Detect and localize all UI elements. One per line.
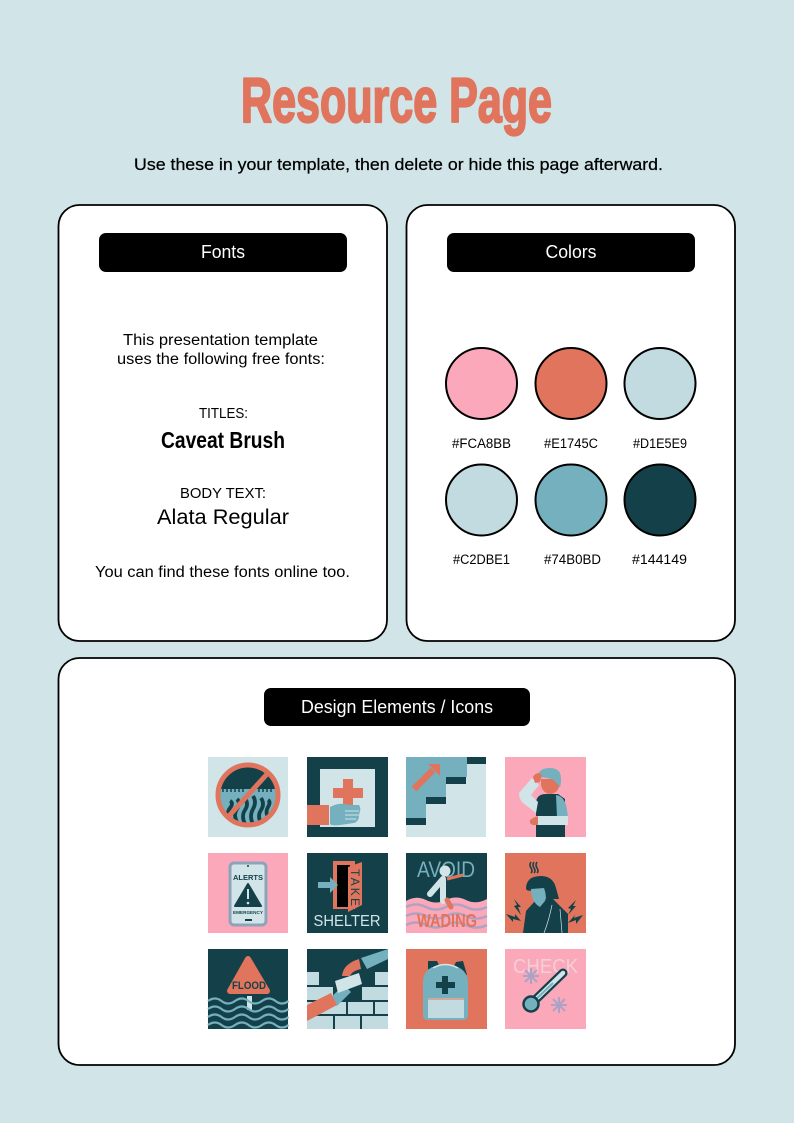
swatch: coral: #E1745C (544, 436, 598, 451)
heading: colors: Colors (546, 242, 596, 262)
swatch: coral (536, 348, 606, 451)
heading: fonts (99, 233, 347, 272)
swatch: dark teal (624, 464, 696, 567)
swatch: teal (536, 464, 606, 567)
text: note: You can find these fonts online too. (95, 564, 350, 581)
icon: check temperature (505, 949, 586, 1029)
swatch: dark teal: #144149 (632, 552, 687, 567)
heading: design elements (264, 688, 530, 726)
heading: design elements: Design Elements / Icons (301, 697, 493, 717)
text: body font: BODY TEXT: (180, 485, 266, 502)
swatch: teal: #74B0BD (544, 552, 601, 567)
icon: no wading (208, 757, 288, 837)
text: intro (117, 332, 325, 368)
text: body font (157, 485, 289, 529)
swatch: pale blue (624, 348, 696, 451)
icon: avoid wading: AVOID (417, 857, 475, 882)
heading: colors (447, 233, 695, 272)
icon: go upstairs (406, 757, 486, 837)
icon: avoid wading (406, 853, 487, 933)
icon: phone alert: ALERTS (233, 873, 263, 882)
icon: avoid wading: WADING (417, 911, 477, 931)
swatch: light blue: #C2DBE1 (453, 552, 510, 567)
icon: take shelter (307, 853, 388, 933)
text: intro: uses the following free fonts: (117, 351, 325, 368)
icon: flood sign: FLOOD (232, 980, 266, 992)
title: Resource Page (241, 66, 552, 136)
text: intro: This presentation template (123, 332, 318, 349)
icon: take shelter: TAKE (348, 869, 362, 906)
text: titles font (161, 405, 285, 453)
icon: take shelter: SHELTER (314, 913, 380, 930)
text: body font: Alata Regular (157, 506, 289, 529)
icon: phone alert (208, 853, 288, 933)
swatch: pale blue: #D1E5E9 (633, 436, 687, 451)
swatch: light blue (446, 464, 517, 567)
panel: colors (406, 205, 735, 641)
swatch: pink (446, 348, 517, 451)
icon: check temperature: CHECK (513, 956, 579, 978)
icon: person with headache (505, 757, 586, 837)
subtitle: Use these in your template, then delete or hide this page afterward. (134, 155, 663, 174)
icon: first aid (307, 757, 388, 837)
icon: stressed woman (505, 853, 586, 933)
text: titles font: Caveat Brush (161, 427, 285, 453)
icon: flood sign (208, 949, 288, 1029)
panel: fonts (58, 205, 387, 641)
swatch: pink: #FCA8BB (452, 436, 511, 451)
text: titles font: TITLES: (199, 405, 248, 422)
heading: fonts: Fonts (201, 242, 245, 262)
icon: phone alert: EMERGENCY (233, 910, 263, 915)
icon: helping hands over wall (307, 949, 388, 1029)
panel: design elements (58, 658, 735, 1065)
icon: emergency backpack (406, 949, 487, 1029)
